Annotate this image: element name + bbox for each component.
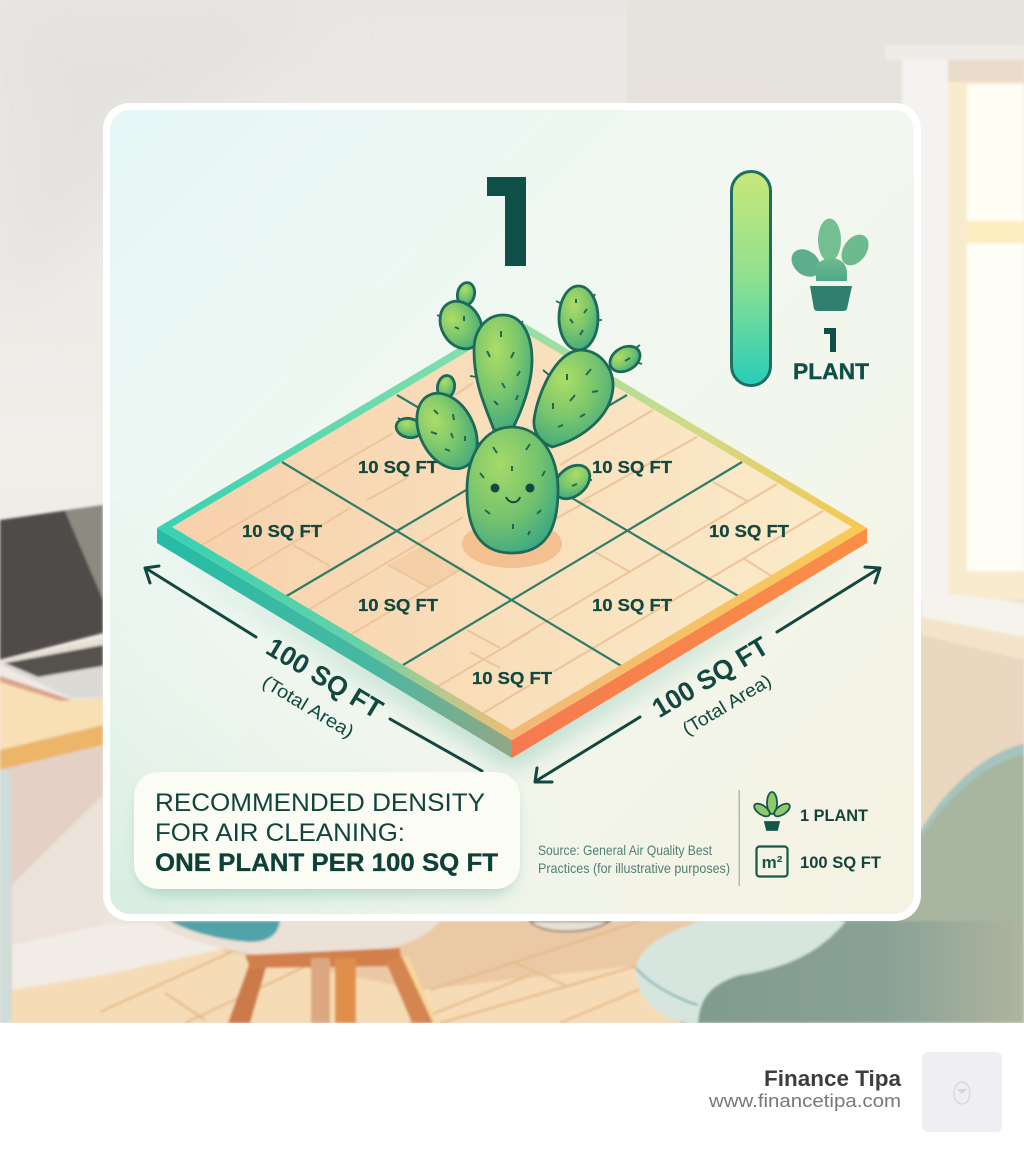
- scale bar: [732, 172, 770, 386]
- board rim: [157, 316, 867, 740]
- right pad: [534, 350, 613, 447]
- callout: recommended density: ONE PLANT PER 100 SQ FT: [155, 849, 498, 877]
- large number: [487, 177, 526, 266]
- plant count label: PLANT: [793, 359, 870, 384]
- left pad: [405, 383, 489, 479]
- callout: recommended density: [134, 772, 520, 889]
- legend: plant: [752, 792, 869, 830]
- small buds: [455, 281, 477, 307]
- board top surface: [157, 316, 867, 740]
- cactus ground shadow: [462, 520, 562, 568]
- cell labels: [242, 457, 789, 688]
- legend: area: [756, 846, 882, 876]
- cell labels: 10 SQ FT: [592, 595, 672, 615]
- cell labels: 10 SQ FT: [592, 457, 672, 477]
- source note: Source: General Air Quality Best: [538, 842, 712, 858]
- cell labels: 10 SQ FT: [709, 521, 789, 541]
- spines: [431, 299, 630, 535]
- grid lines: [282, 395, 742, 667]
- plant count label: 1: [821, 323, 839, 359]
- board side faces: [157, 528, 867, 758]
- cell labels: 10 SQ FT: [358, 595, 438, 615]
- icon: sprout: [752, 792, 792, 830]
- board shadow: [157, 550, 867, 770]
- plant count label: [794, 328, 870, 380]
- cell labels: 10 SQ FT: [472, 668, 552, 688]
- brand url: www.financetipa.com: [708, 1090, 901, 1111]
- cell labels: 10 SQ FT: [358, 457, 438, 477]
- brand name: Finance Tipa: [764, 1066, 902, 1091]
- dining chair: [150, 921, 440, 958]
- small plant icon: [786, 218, 874, 311]
- large number: 1: [472, 155, 540, 293]
- laptop: [0, 505, 103, 660]
- right dimension label: (Total Area): [678, 670, 775, 739]
- main card: [103, 103, 921, 921]
- left dimension arrow: [145, 566, 482, 771]
- armchair: [840, 754, 1024, 922]
- callout shadow: [138, 782, 516, 894]
- callout: recommended density: RECOMMENDED DENSITY: [155, 789, 485, 817]
- tall center pad: [474, 315, 532, 430]
- legend: plant: 1 PLANT: [800, 806, 869, 825]
- source note: Practices (for illustrative purposes): [538, 860, 730, 876]
- logo placeholder: [922, 1052, 1002, 1132]
- floor: [11, 949, 680, 1023]
- cactus illustration: [394, 281, 645, 568]
- legend: area: 100 SQ FT: [800, 853, 882, 872]
- left dimension label: 100 SQ FT: [261, 632, 389, 725]
- plank lines: [202, 383, 823, 715]
- upper left pad: [432, 294, 490, 356]
- footer band: [0, 1023, 1024, 1154]
- isometric floor board: [157, 316, 867, 758]
- icon: square metres: m²: [762, 853, 783, 872]
- callout: recommended density: FOR AIR CLEANING:: [155, 819, 405, 847]
- left dimension label: (Total Area): [259, 671, 358, 742]
- cell labels: 10 SQ FT: [242, 521, 322, 541]
- desk: [0, 682, 103, 750]
- right dimension arrow: [535, 567, 880, 782]
- main pad with face: [467, 427, 558, 553]
- right dimension label: 100 SQ FT: [647, 631, 774, 724]
- source note: [538, 842, 730, 876]
